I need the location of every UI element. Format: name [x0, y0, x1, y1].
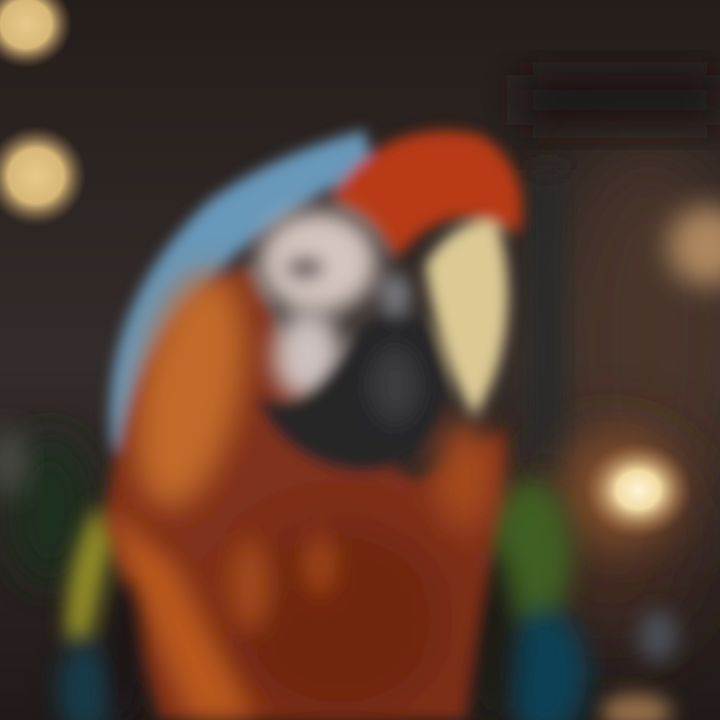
head: red crown [330, 131, 522, 260]
body: orange plumage [105, 262, 506, 720]
face: white patch [258, 210, 378, 399]
wing: left yellow and blue feathers [59, 505, 112, 720]
beak: cream upper mandible [425, 221, 508, 415]
beak: dark lower mandible [255, 273, 446, 472]
wing: right green and blue feathers [465, 480, 587, 720]
blue crest arc [110, 130, 372, 455]
parrot [59, 130, 587, 720]
foliage left [0, 428, 92, 585]
